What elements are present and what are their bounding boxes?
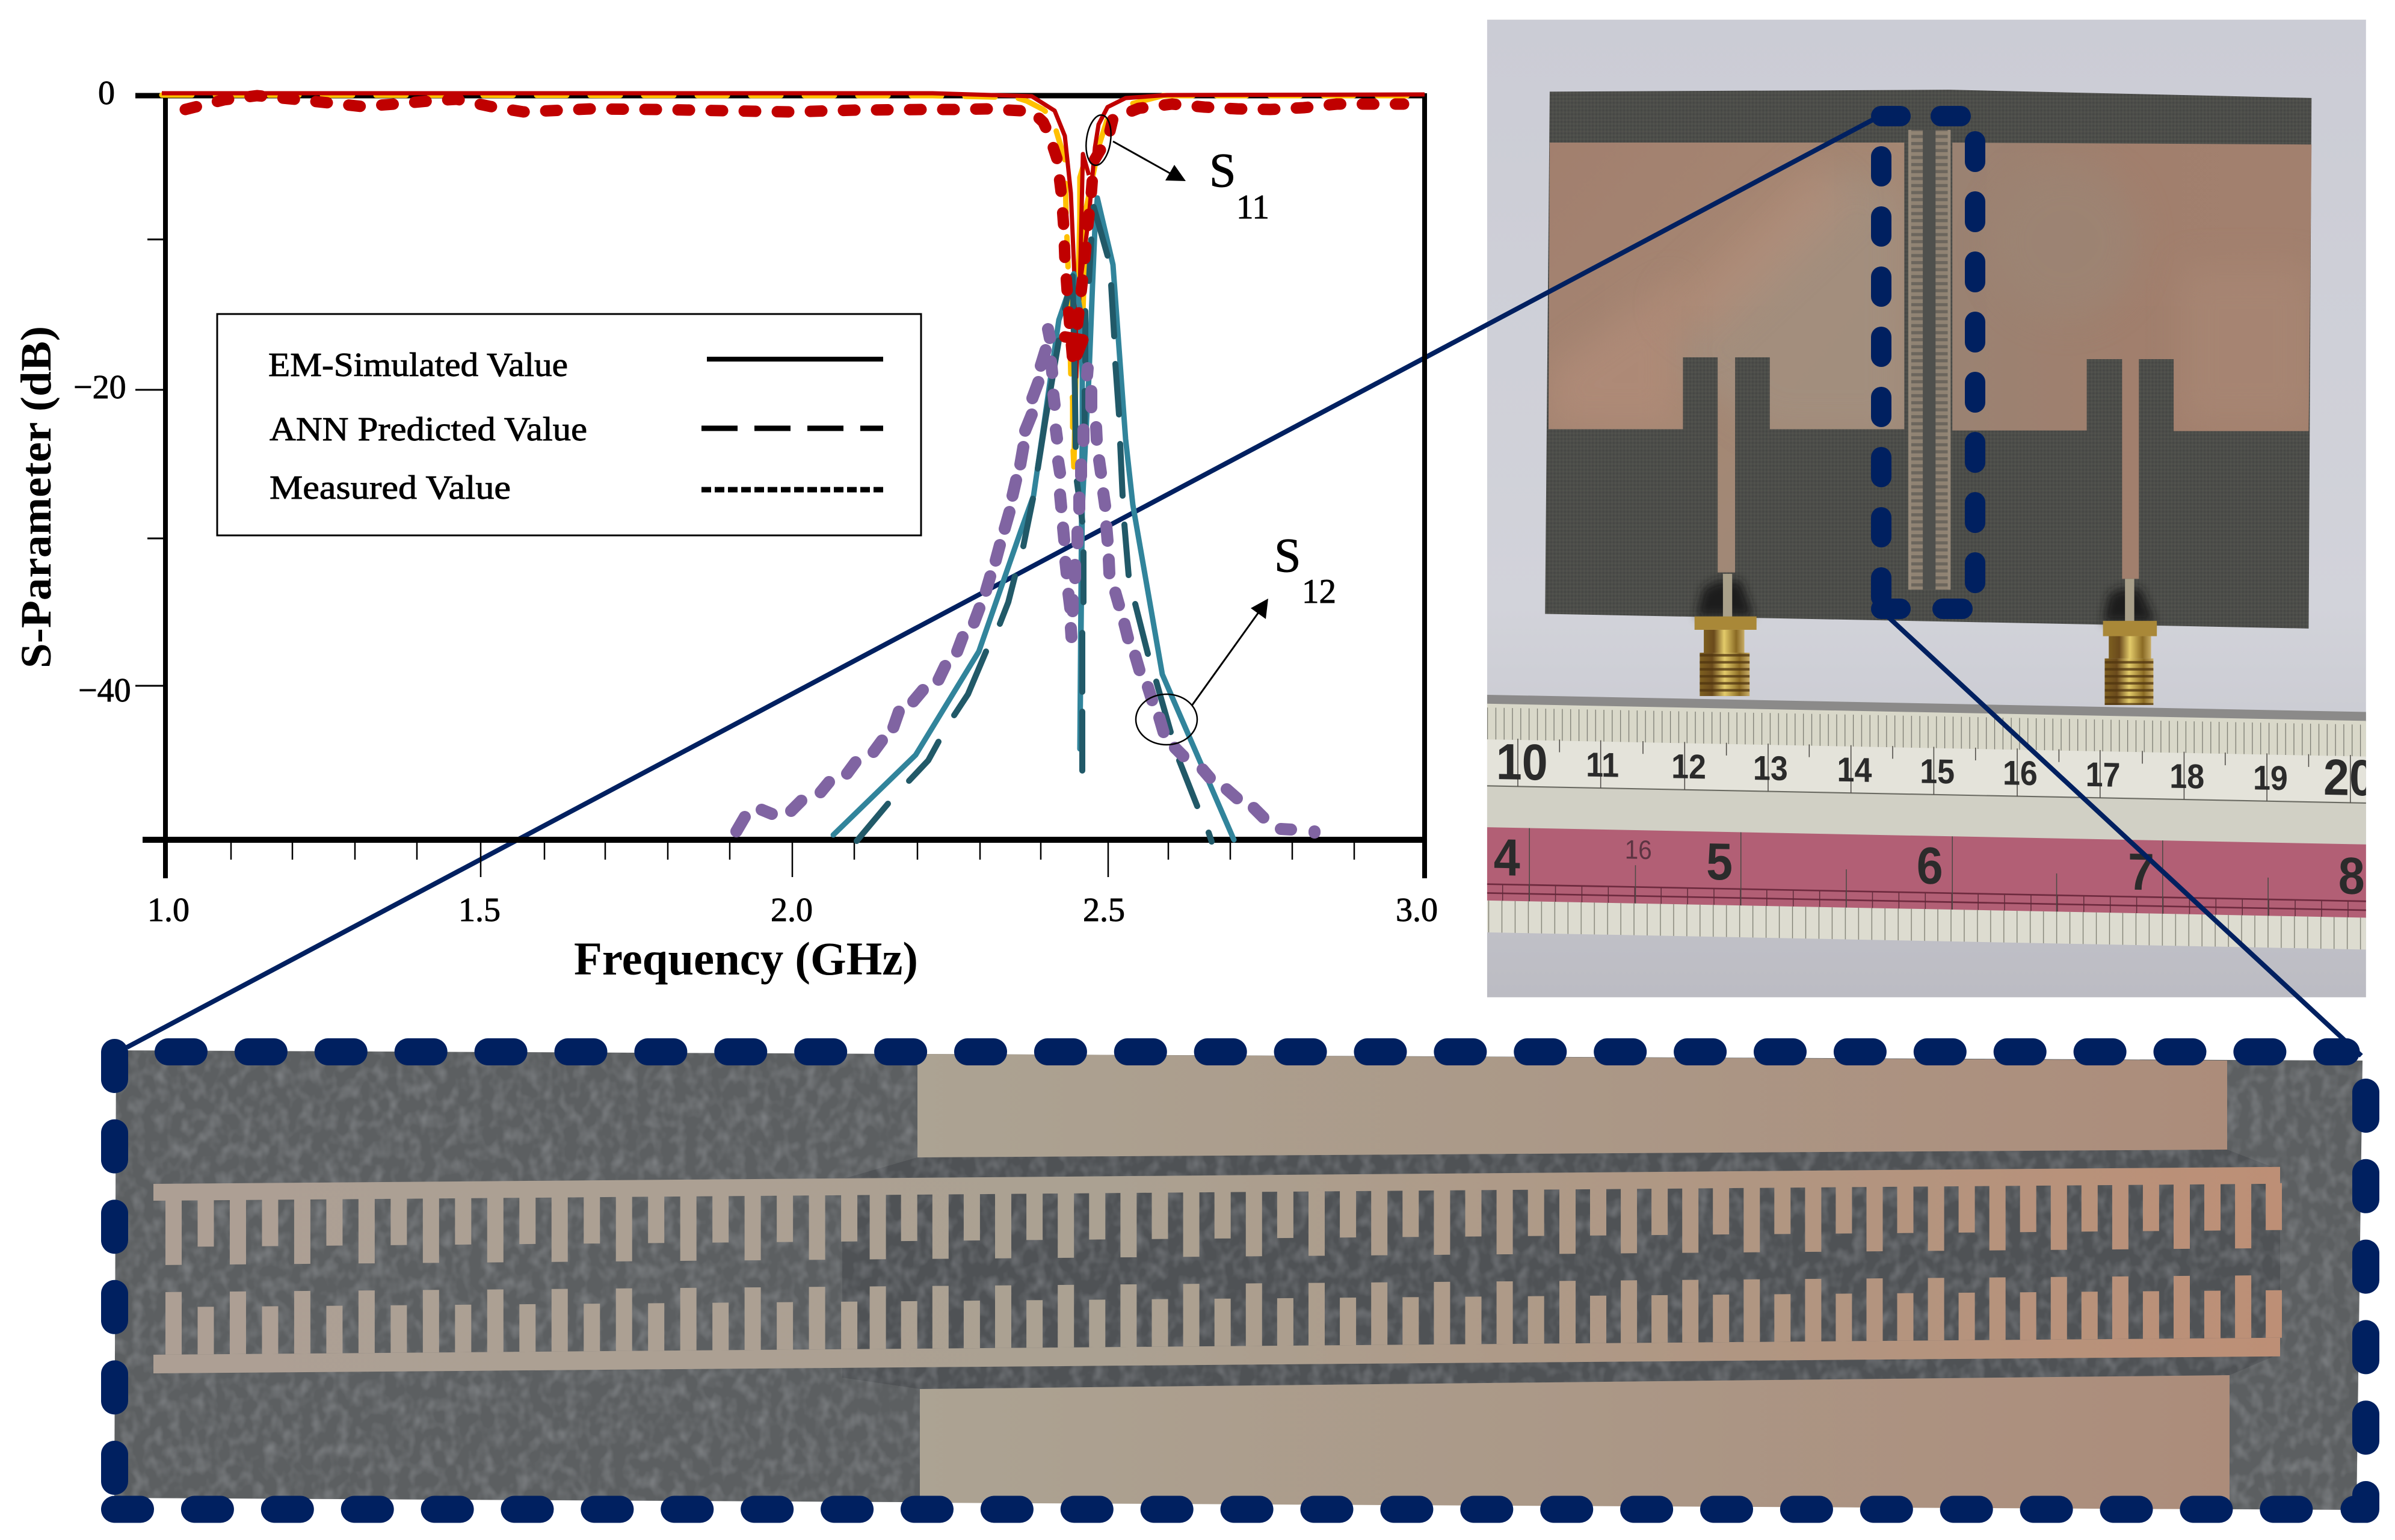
curve: S12 measured [736, 329, 1315, 833]
x axis labels: 1.0 [147, 892, 190, 929]
rulers [1486, 695, 2375, 950]
zoom connector line lower [1888, 617, 2361, 1056]
ruler numbers: 4 [1494, 828, 1520, 887]
photo background [1487, 20, 2366, 997]
lower comb long fingers [165, 1307, 2253, 1323]
upper comb bar [153, 1175, 2280, 1192]
annotation: S11: 11 [1236, 188, 1269, 226]
ruler numbers: 15 [1920, 752, 1955, 791]
ruler numbers: 17 [2086, 756, 2121, 794]
curve: S12 ANN predicted [857, 207, 1212, 842]
lower comb short fingers [197, 1314, 2282, 1331]
copper patch top [917, 1054, 2227, 1157]
interdigital comb resonators [153, 1175, 2282, 1364]
ruler numbers: 7 [2128, 842, 2154, 901]
legend: EM-Simulated Value [268, 346, 568, 384]
x axis title: Frequency (GHz) [574, 932, 918, 985]
zoom connector line upper [127, 119, 1874, 1047]
curve: S12 EM simulated [833, 198, 1234, 840]
curve: S11 ANN predicted [162, 95, 1425, 467]
annotation: S12 [1136, 529, 1336, 745]
y axis labels [73, 75, 131, 709]
annotation: S12: 12 [1302, 573, 1336, 611]
x axis labels: 3.0 [1396, 892, 1438, 929]
annotation: S12: S [1274, 529, 1301, 582]
panel: photograph of fabricated filter [1486, 20, 2375, 997]
x axis labels: 2.0 [771, 892, 813, 929]
upper comb long fingers [165, 1216, 2253, 1233]
copper patch bottom [920, 1375, 2230, 1509]
axes [135, 93, 1425, 878]
annotation: S11 [1083, 114, 1269, 226]
ruler numbers: 6 [1917, 836, 1943, 895]
y axis title: S-Parameter (dB) [12, 326, 60, 668]
ruler numbers: 19 [2253, 759, 2288, 798]
dashed highlight rectangle on photo [1881, 116, 1975, 609]
x axis labels: 1.5 [458, 892, 501, 929]
ruler numbers: 5 [1706, 832, 1733, 891]
fabricated PCB [1545, 90, 2311, 629]
ruler numbers: 16 [2003, 754, 2038, 793]
ruler numbers: 12 [1671, 747, 1706, 786]
curve: S11 measured [185, 96, 1404, 359]
darker substrate around combs [842, 1150, 2280, 1389]
curve: S11 EM simulated [162, 93, 1425, 377]
ruler numbers: 10 [1496, 734, 1548, 792]
x axis labels: 2.5 [1083, 892, 1125, 929]
y axis labels: −40 [78, 672, 131, 709]
annotation: S11: S [1209, 144, 1236, 197]
ruler numbers: 14 [1837, 750, 1872, 789]
ruler numbers: 11 [1586, 745, 1619, 784]
legend [217, 314, 921, 535]
legend: ANN Predicted Value [270, 411, 587, 448]
ruler major ticks [1518, 739, 2350, 917]
panel: zoomed comb filter photo [114, 1050, 2364, 1511]
SMA connector right [2103, 579, 2157, 705]
legend: Measured Value [270, 469, 511, 507]
ruler numbers: 8 [2338, 846, 2365, 905]
ruler numbers [1494, 744, 2366, 895]
SMA connector left [1695, 574, 1757, 696]
y axis labels: −20 [73, 369, 126, 406]
ruler numbers: 20 [2323, 750, 2375, 807]
x axis labels [147, 892, 1438, 929]
dashed highlight border on zoomed panel [114, 1052, 2366, 1509]
chart: S-parameter vs frequency [12, 75, 1438, 985]
dark substrate [114, 1050, 2363, 1510]
substrate weave texture [114, 1050, 2364, 1511]
y axis labels: 0 [98, 75, 115, 112]
ruler numbers: 18 [2169, 757, 2204, 796]
lower comb bar [153, 1347, 2280, 1364]
upper comb short fingers [197, 1207, 2282, 1223]
ruler numbers: 16 [1625, 836, 1652, 866]
ruler numbers: 13 [1753, 749, 1788, 788]
